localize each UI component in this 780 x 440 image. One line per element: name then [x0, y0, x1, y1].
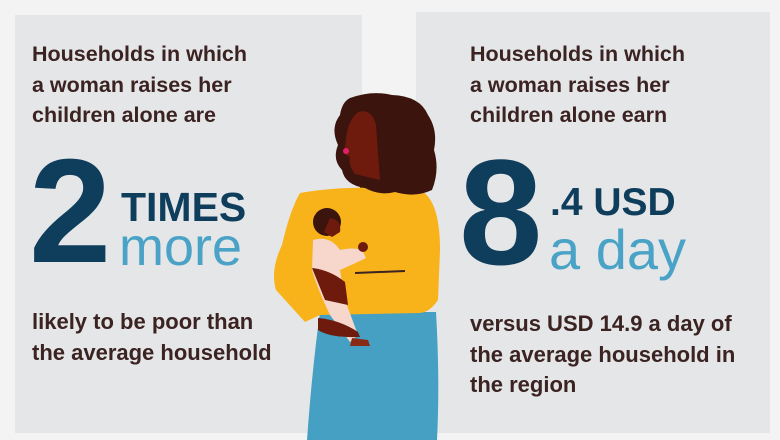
left heading text: Households in which [32, 42, 247, 66]
right bottom text: the region [470, 372, 576, 397]
left bottom text [32, 309, 272, 364]
a day label: a day [549, 218, 686, 281]
big number 8: 8 [459, 128, 542, 296]
right bottom text: versus USD 14.9 a day of [470, 311, 732, 336]
right heading text: a woman raises her [470, 72, 670, 96]
right heading text: children alone earn [470, 103, 667, 127]
right heading text: Households in which [470, 42, 685, 66]
left heading text: a woman raises her [32, 72, 232, 96]
right heading text [470, 42, 685, 127]
left bottom text: the average household [32, 340, 272, 364]
neck [360, 165, 392, 195]
.4 USD label: .4 USD [550, 181, 676, 224]
TIMES label: TIMES [121, 184, 246, 230]
left bottom text: likely to be poor than [32, 309, 253, 334]
left heading text [32, 42, 247, 127]
mother's arm/hand [312, 268, 348, 305]
panel: right [416, 12, 770, 433]
right bottom text: the average household in [470, 342, 735, 366]
face [343, 111, 380, 180]
left heading text: children alone are [32, 103, 216, 127]
big number 2: 2 [29, 129, 111, 294]
hair [334, 93, 437, 195]
shirt [274, 188, 440, 322]
pants [307, 312, 438, 440]
more label: more [119, 217, 242, 277]
panel: left [15, 15, 362, 433]
right bottom text [470, 311, 735, 397]
baby body [312, 239, 366, 342]
baby head [313, 208, 341, 236]
